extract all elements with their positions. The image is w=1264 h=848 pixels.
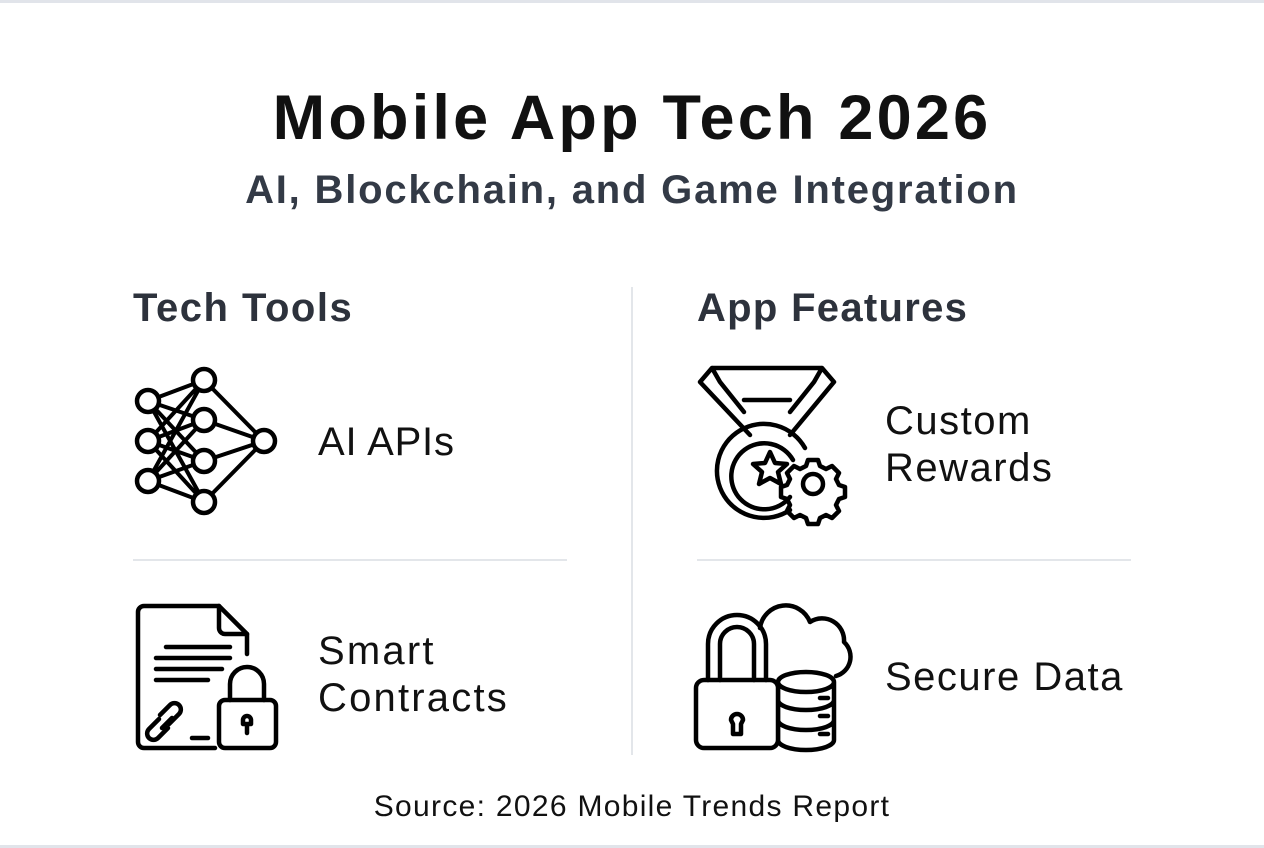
icon: smart contract bbox=[138, 606, 276, 748]
label: Custom Rewards bbox=[885, 399, 1053, 490]
label: Smart Contracts: Contracts bbox=[318, 676, 509, 720]
source: Source: 2026 Mobile Trends Report bbox=[374, 790, 890, 823]
label: Custom Rewards: Rewards bbox=[885, 446, 1053, 490]
label: AI APIs: AI APIs bbox=[318, 420, 455, 464]
heading: App Features: App Features bbox=[697, 286, 968, 330]
label: Smart Contracts bbox=[318, 629, 509, 720]
icon: secure data bbox=[696, 605, 851, 750]
label: Custom Rewards: Custom bbox=[885, 399, 1032, 443]
heading: Tech Tools: Tech Tools bbox=[133, 286, 353, 330]
label: Secure Data: Secure Data bbox=[885, 655, 1124, 699]
icon: neural network bbox=[137, 369, 275, 513]
icon: medal with gear bbox=[700, 368, 845, 524]
subtitle: AI, Blockchain, and Game Integration bbox=[245, 168, 1019, 212]
title: Mobile App Tech 2026 bbox=[273, 83, 991, 153]
label: Smart Contracts: Smart bbox=[318, 629, 436, 673]
